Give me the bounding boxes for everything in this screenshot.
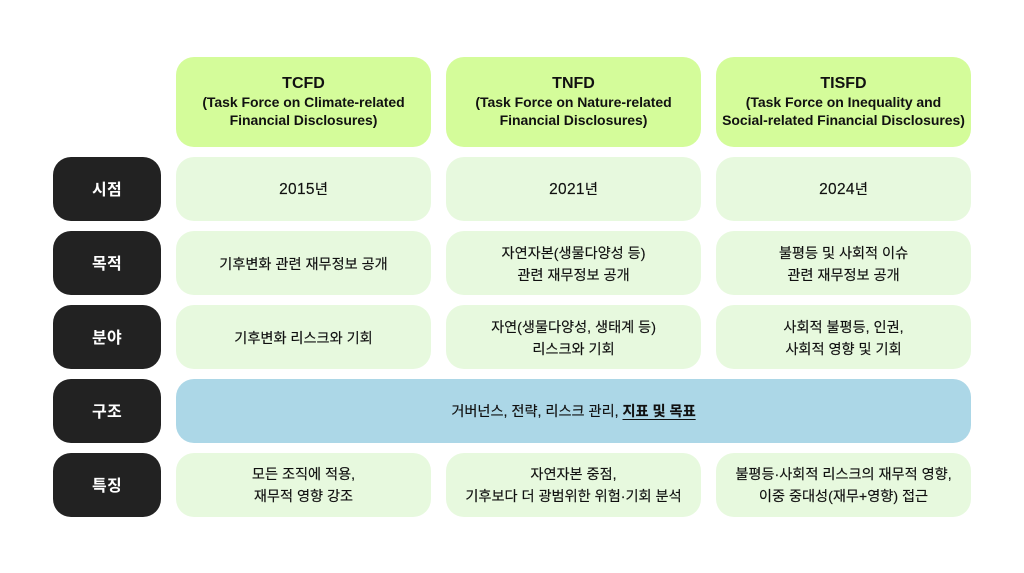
row label: 분야 [53,305,161,369]
row label: 목적 [53,231,161,295]
TISFD 목적 [716,231,971,295]
TNFD 시점: 2021년 [549,181,598,198]
TCFD 목적 [176,231,431,295]
TISFD 분야: 사회적 불평등, 인권, [783,320,904,336]
TCFD 특징 [176,453,431,517]
TNFD 특징: 자연자본 중점, [530,467,617,483]
TISFD 시점: 2024년 [819,181,868,198]
TCFD 시점 [176,157,431,221]
TNFD 분야: 리스크와 기회 [532,342,615,358]
TCFD 분야: 기후변화 리스크와 기회 [234,330,373,346]
TCFD 특징: 재무적 영향 강조 [254,489,353,505]
TNFD 특징: 기후보다 더 광범위한 위험·기회 분석 [465,489,682,505]
row label: 시점: 시점 [92,182,122,199]
column header: TISFD: TISFD [820,75,867,92]
TCFD 특징: 모든 조직에 적용, [252,467,355,483]
TNFD 특징 [446,453,701,517]
column header: TISFD [716,57,971,147]
TISFD 시점 [716,157,971,221]
column header: TISFD: (Task Force on Inequality and [746,94,941,110]
row label: 특징: 특징 [92,478,122,495]
TCFD 분야 [176,305,431,369]
column header: TCFD: Financial Disclosures) [230,112,377,128]
TNFD 목적: 관련 재무정보 공개 [517,268,630,284]
shared 구조 band: 거버넌스, 전략, 리스크 관리, 지표 및 목표 [451,404,696,420]
row label: 분야: 분야 [92,330,122,347]
row label: 목적: 목적 [92,256,122,273]
TISFD 특징: 불평등·사회적 리스크의 재무적 영향, [735,467,952,483]
TNFD 목적 [446,231,701,295]
row label: 특징 [53,453,161,517]
TNFD 시점 [446,157,701,221]
shared 구조 band [176,379,971,443]
TISFD 분야: 사회적 영향 및 기회 [785,342,902,358]
TISFD 특징: 이중 중대성(재무+영향) 접근 [759,489,928,505]
row label: 시점 [53,157,161,221]
row label: 구조 [53,379,161,443]
TNFD 분야 [446,305,701,369]
TNFD 목적: 자연자본(생물다양성 등) [502,246,645,262]
column header: TISFD: Social-related Financial Disclosures) [722,112,965,128]
column header: TNFD [446,57,701,147]
TISFD 특징 [716,453,971,517]
TISFD 목적: 불평등 및 사회적 이슈 [779,246,908,262]
TISFD 목적: 관련 재무정보 공개 [787,268,900,284]
column header: TNFD: Financial Disclosures) [500,112,647,128]
column header: TNFD: (Task Force on Nature-related [475,94,672,110]
column header: TCFD: (Task Force on Climate-related [202,94,405,110]
TISFD 분야 [716,305,971,369]
TCFD 목적: 기후변화 관련 재무정보 공개 [219,256,388,272]
column header: TCFD [176,57,431,147]
column header: TNFD: TNFD [552,75,595,92]
column header: TCFD: TCFD [282,75,325,92]
TNFD 분야: 자연(생물다양성, 생태계 등) [491,320,656,336]
TCFD 시점: 2015년 [279,181,328,198]
row label: 구조: 구조 [92,404,122,421]
